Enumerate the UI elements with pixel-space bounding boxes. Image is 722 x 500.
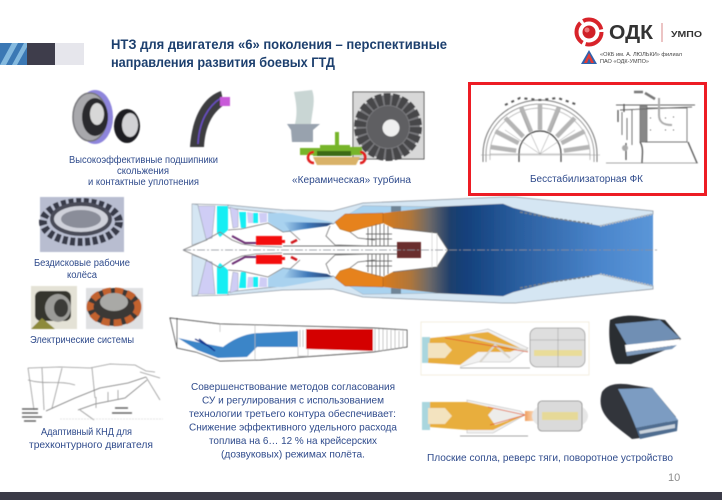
footer bar xyxy=(0,492,722,500)
logo: ODK UMPO: ОДК xyxy=(609,22,654,44)
logo: ODK UMPO: УМПО xyxy=(671,29,702,39)
drawing: afterburner front view xyxy=(481,98,600,162)
label: bladeless disks xyxy=(34,257,130,281)
logo: Lyulka bureau xyxy=(581,50,682,65)
image: electric machine stator xyxy=(86,288,143,329)
label: adaptive LPC xyxy=(29,426,153,451)
label: afterburner: Бесстабилизаторная ФК xyxy=(530,173,643,185)
label: bearings: Высокоэффективные подшипники xyxy=(69,154,218,166)
label: bearings: скольжения xyxy=(117,166,169,177)
text block: third stream benefits: Совершенствование методов согласования xyxy=(191,381,395,393)
image: flat nozzle 3D lower xyxy=(601,384,678,439)
drawing: flat nozzle straight flow xyxy=(422,400,588,436)
drawing: third-stream duct engine layout xyxy=(170,318,407,361)
title: направления развития боевых ГТД xyxy=(111,54,335,70)
logo: Lyulka bureau: «ОКБ им. А. ЛЮЛЬКИ» филиал xyxy=(600,52,682,58)
image: sliding bearing and ring xyxy=(73,90,140,144)
title: НТЗ для двигателя «6» поколения – перспективные xyxy=(111,36,447,52)
chart: engine cross-section xyxy=(183,197,657,303)
panel: stabilizer-free afterburner xyxy=(470,84,706,194)
logo: ODK UMPO xyxy=(576,20,702,44)
drawing: afterburner side view xyxy=(606,92,698,163)
image: electric machine rotor xyxy=(31,286,77,329)
logo: Lyulka bureau: ПАО «ОДК-УМПО» xyxy=(600,59,649,65)
image: ceramic shroud section xyxy=(300,132,365,165)
text block: third stream benefits: топлива на 6… 12 % на крейсерских xyxy=(209,435,378,447)
image: ceramic turbine wheel photo xyxy=(353,92,424,159)
image: flat nozzle 3D upper xyxy=(609,316,681,364)
image: bladeless disk photo xyxy=(40,197,124,252)
page number: 10 xyxy=(668,472,680,484)
drawing: adaptive low-pressure compressor xyxy=(22,364,163,421)
image: contact seal segment xyxy=(190,91,230,147)
label: adaptive LPC: Адаптивный КНД для xyxy=(41,426,132,438)
label: ceramic turbine: «Керамическая» турбина xyxy=(292,174,411,186)
text block: third stream benefits: Снижение эффективного удельного расхода xyxy=(189,422,397,434)
label: bladeless disks: Бездисковые рабочие xyxy=(34,257,130,269)
label: bladeless disks: колёса xyxy=(67,270,97,281)
label: flat nozzles: Плоские сопла, реверс тяги, поворотное устройство xyxy=(427,453,673,464)
drawing: flat nozzle with thrust reverser xyxy=(421,322,589,375)
label: bearings: и контактные уплотнения xyxy=(88,177,199,188)
text block: third stream benefits: технологии третьего контура обеспечивает: xyxy=(189,408,396,420)
text block: third stream benefits: (дозвуковых) режимах полёта. xyxy=(221,448,365,460)
text block: third stream benefits xyxy=(189,381,397,460)
label: electric systems: Электрические системы xyxy=(30,335,134,346)
label: bearings xyxy=(69,154,218,188)
text block: third stream benefits: СУ и регулирования с использованием xyxy=(202,394,384,406)
image: ceramic blade xyxy=(287,90,320,142)
header accent strip xyxy=(0,43,84,65)
label: adaptive LPC: трехконтурного двигателя xyxy=(29,439,153,451)
